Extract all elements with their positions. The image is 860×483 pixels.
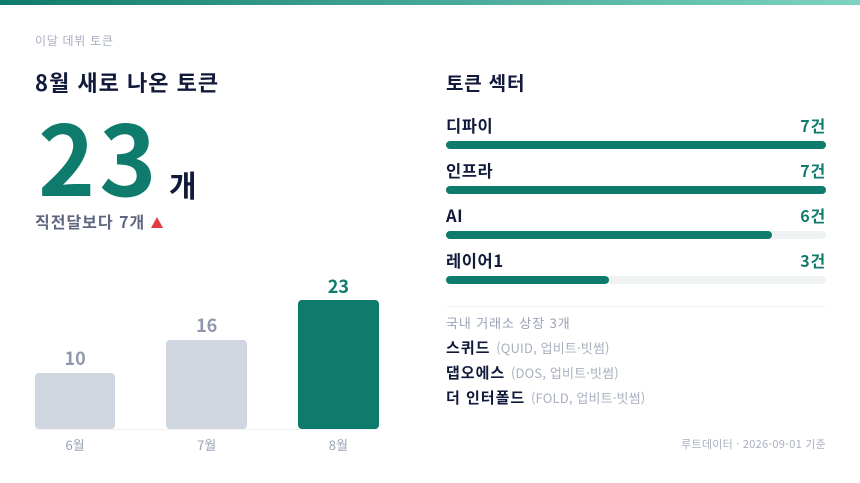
left heading: 8월 새로 나온 토큰 bbox=[35, 66, 219, 98]
comparison text: 직전달보다 7개 bbox=[35, 209, 145, 233]
bar: June bbox=[35, 373, 115, 429]
sector row: DeFi bbox=[446, 113, 826, 149]
sector name: 디파이 bbox=[446, 113, 493, 137]
sector bar track bbox=[446, 276, 826, 284]
source footnote: 루트데이터 · 2026-09-01 기준 bbox=[681, 436, 826, 452]
sector count: 7건 bbox=[800, 158, 826, 182]
sector name: 레이어1 bbox=[446, 248, 504, 272]
right heading: 토큰 섹터 bbox=[446, 69, 525, 96]
bar chart bbox=[35, 273, 379, 454]
eyebrow label: 이달 데뷔 토큰 bbox=[35, 32, 114, 49]
sector row: Layer 1 bbox=[446, 248, 826, 284]
listing subheading: 국내 거래소 상장 3개 bbox=[446, 313, 571, 332]
label: August: 8월 bbox=[329, 435, 348, 454]
sector bar bbox=[446, 186, 826, 194]
value: August: 23 bbox=[328, 273, 349, 299]
sector name: 인프라 bbox=[446, 158, 493, 182]
listing: DOS: 댑오에스 (DOS, 업비트·빗썸) bbox=[446, 362, 619, 383]
sector bar bbox=[446, 141, 826, 149]
value: July: 16 bbox=[196, 312, 217, 338]
sector row: AI bbox=[446, 203, 826, 239]
sector count: 6건 bbox=[800, 203, 826, 227]
sector bar fill bbox=[446, 276, 609, 284]
listing: QUID: 스퀴드 (QUID, 업비트·빗썸) bbox=[446, 337, 610, 358]
sector count: 3건 bbox=[800, 248, 826, 272]
value: June: 10 bbox=[64, 345, 86, 371]
bar: August bbox=[298, 300, 379, 429]
label: June: 6월 bbox=[66, 435, 85, 454]
icon: red up triangle bbox=[151, 217, 163, 228]
baseline bbox=[35, 429, 379, 430]
sector row: Infra bbox=[446, 158, 826, 194]
bar: July bbox=[166, 340, 247, 429]
big number unit: 개 bbox=[169, 162, 197, 206]
sector bar fill bbox=[446, 231, 772, 239]
listing: FOLD: 더 인터폴드 (FOLD, 업비트·빗썸) bbox=[446, 387, 645, 408]
top gradient bar bbox=[0, 0, 860, 5]
sector name: AI bbox=[446, 203, 463, 227]
sector count: 7건 bbox=[800, 113, 826, 137]
sector bar track bbox=[446, 231, 826, 239]
big number: 23 bbox=[38, 83, 160, 224]
label: July: 7월 bbox=[197, 435, 216, 454]
